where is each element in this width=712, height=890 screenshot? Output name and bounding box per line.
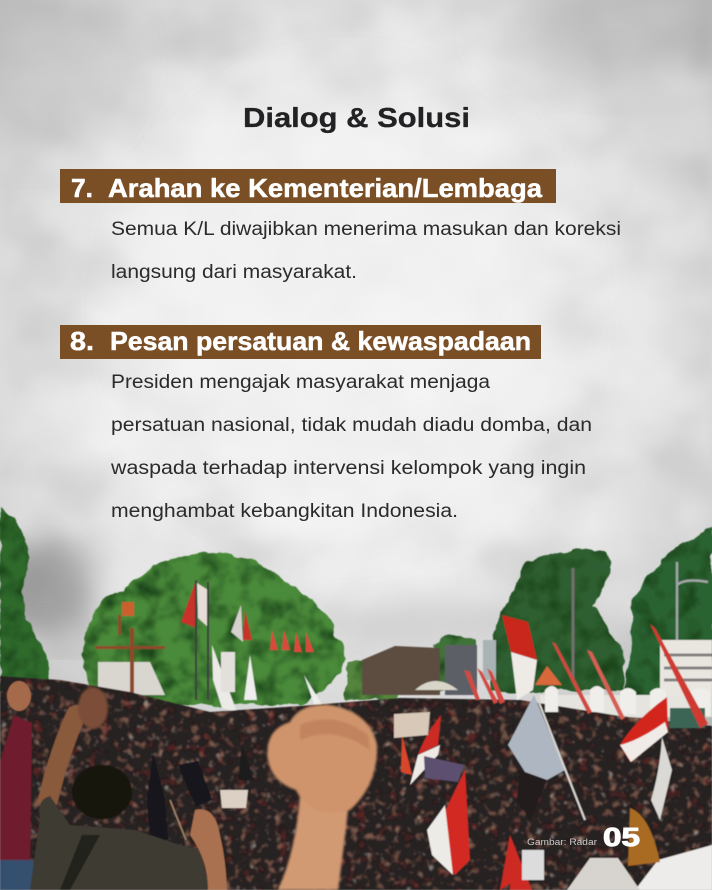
heading bar: section 7: 7. (71, 173, 93, 203)
red lamp monument (95, 602, 165, 718)
photo: protest crowd (0, 506, 712, 890)
text block: section 7: Semua K/L diwajibkan menerima masukan dan koreksi (111, 219, 621, 240)
crowd (0, 670, 712, 890)
background flags (181, 580, 324, 712)
page number: 05 (603, 822, 640, 852)
text block: section 8 (110, 372, 592, 522)
text block: section 7: langsung dari masyarakat. (111, 262, 357, 283)
left protester in maroon (0, 681, 36, 890)
text block: section 8: waspada terhadap intervensi kelompok yang ingin (110, 458, 586, 479)
heading bar: section 7: Arahan ke Kementerian/Lembaga (108, 173, 543, 203)
poles (573, 562, 708, 690)
right side fence and banner (545, 640, 712, 728)
man with raised hand and phone (30, 687, 227, 890)
photo credit: Gambar: Radar (527, 837, 597, 848)
text block: section 8: menghambat kebangkitan Indonesia. (111, 501, 458, 522)
text block: section 7 (111, 219, 621, 283)
text block: section 8: Presiden mengajak masyarakat menjaga (111, 372, 490, 393)
title: Dialog & Solusi (243, 102, 470, 133)
trees (0, 506, 712, 705)
text block: section 8: persatuan nasional, tidak mudah diadu domba, dan (111, 415, 592, 436)
heading bar: section 8: Pesan persatuan & kewaspadaan (110, 326, 531, 356)
heading bar: section 8: 8. (70, 326, 94, 356)
foreground flags and streamers (147, 615, 712, 890)
buildings (98, 640, 712, 717)
raised fist (267, 705, 377, 890)
